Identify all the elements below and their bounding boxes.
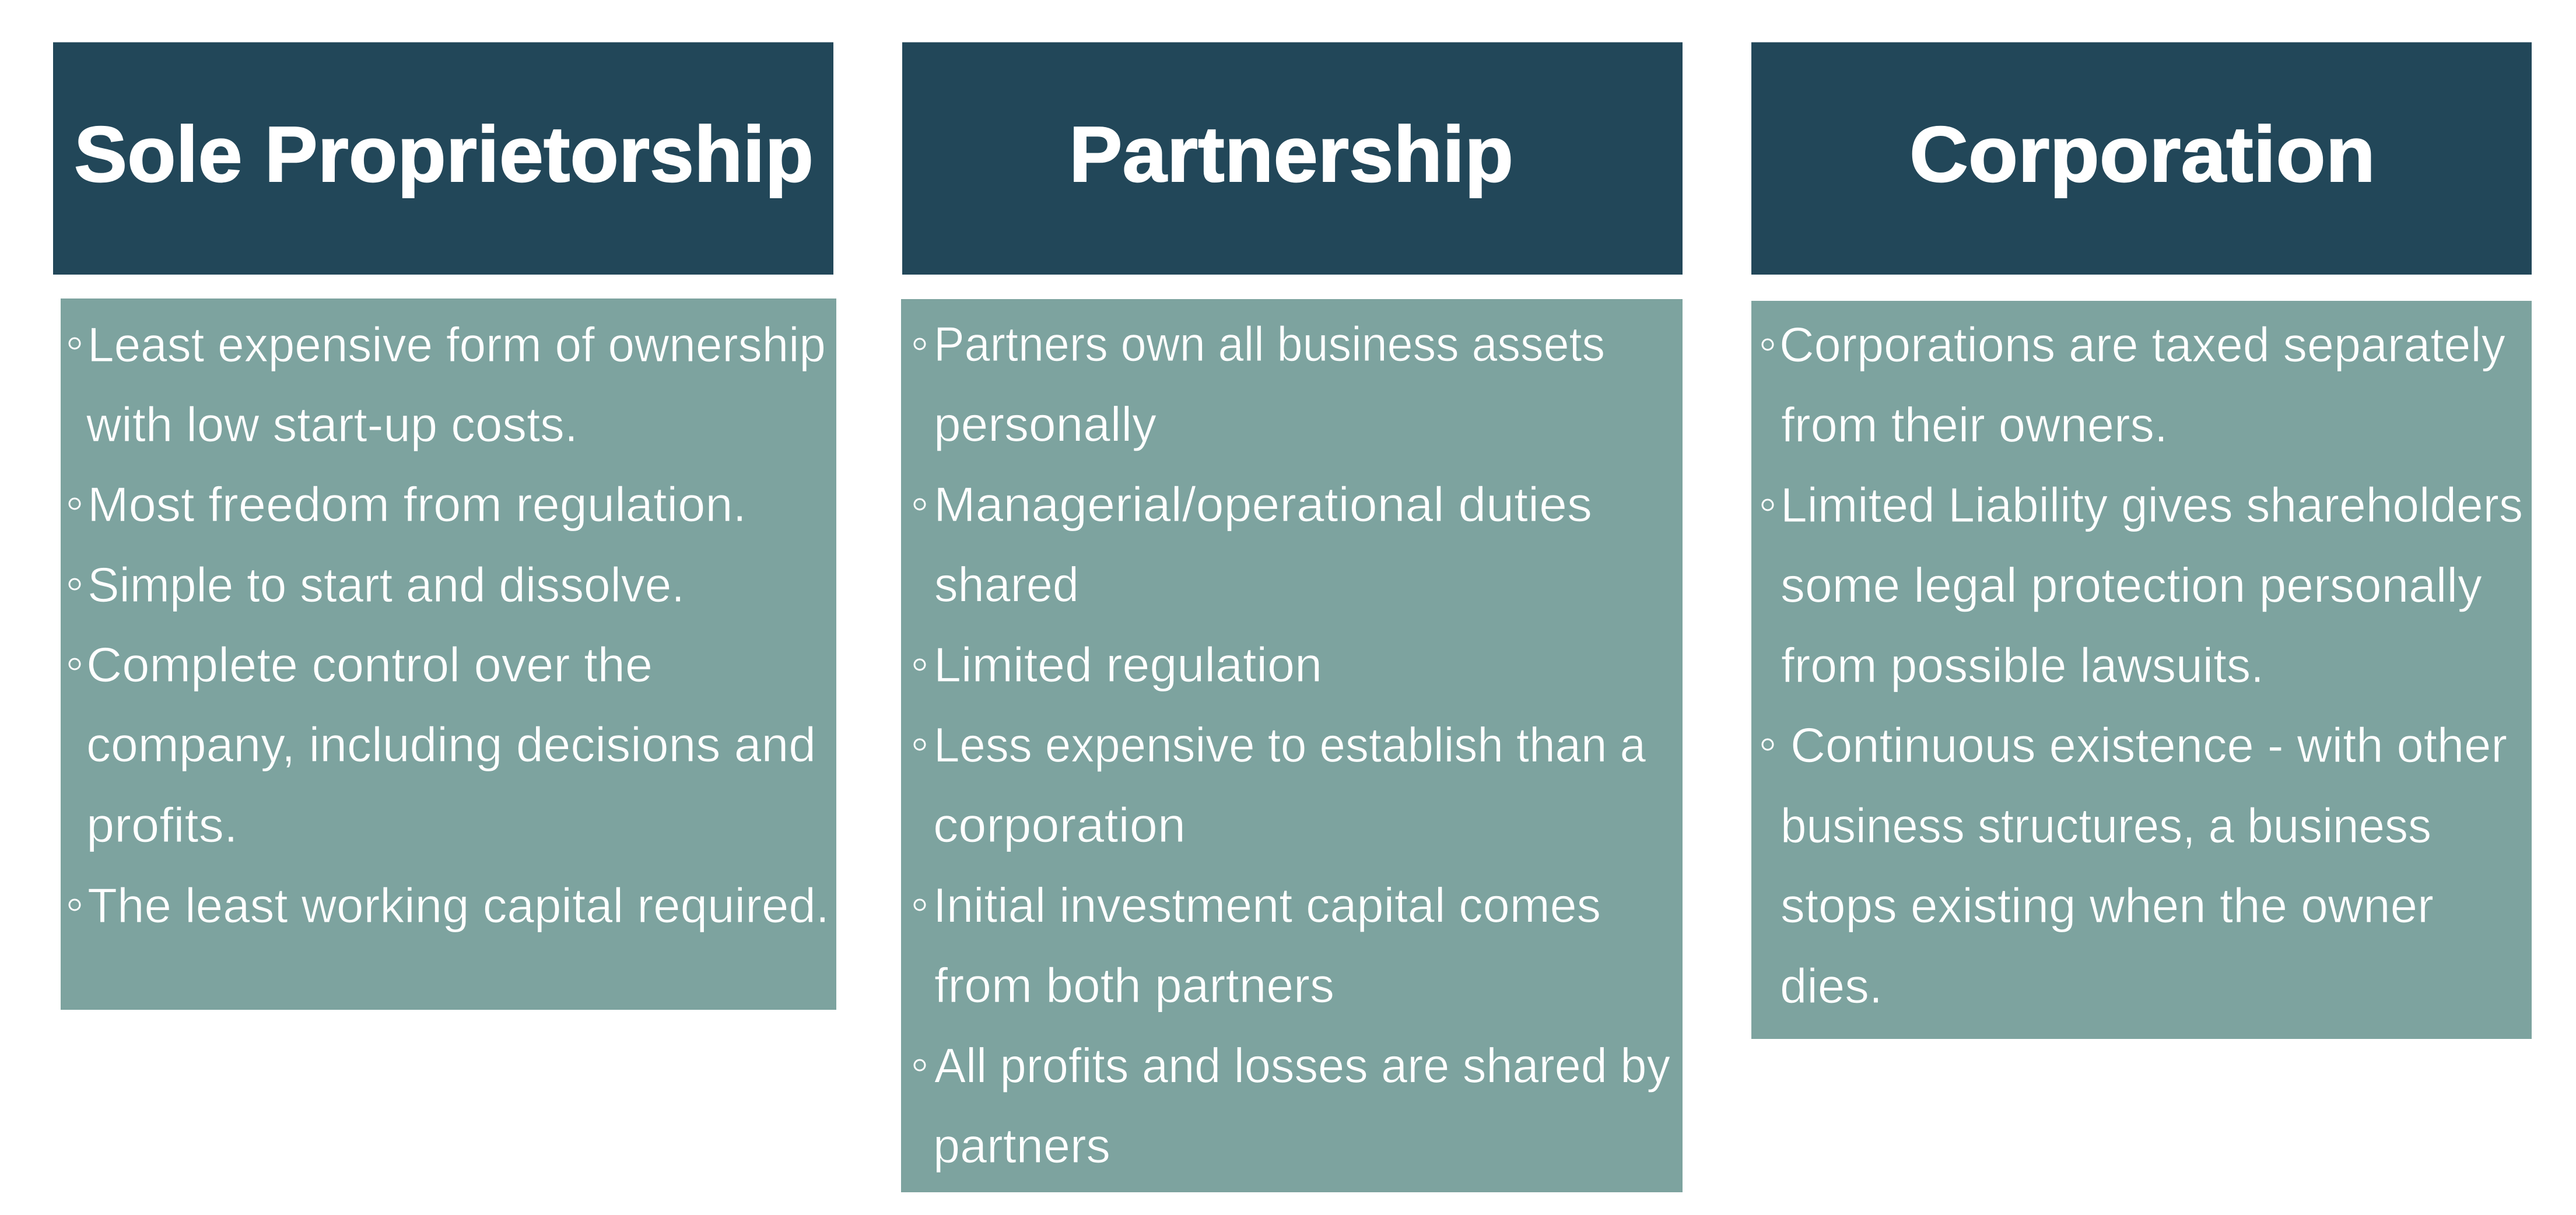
bullet: investment capital: from both partners [934, 958, 1334, 1013]
bullet: continuous existence [1762, 718, 2507, 1013]
bullet: duties shared: Managerial/operational duties [934, 477, 1592, 532]
bullet: continuous existence: business structures, a business [1781, 798, 2431, 853]
bullet: simple to start: Simple to start and dissolve. [87, 557, 685, 612]
bullet: profits and losses: All profits and losses are shared by [934, 1038, 1670, 1093]
bullet: profits and losses [914, 1038, 1670, 1173]
bullet: business assets [914, 317, 1605, 451]
bullet: taxed separately [1762, 317, 2505, 452]
bullet: business assets: personally [934, 396, 1156, 451]
bullet: duties shared: shared [934, 557, 1079, 612]
bullet: limited regulation: Limited regulation [934, 637, 1322, 692]
bullet: low cost: Least expensive form of ownership [87, 317, 826, 372]
heading panel: Corporation: Corporation [1909, 110, 2375, 198]
bullet: complete control: Complete control over the [86, 637, 653, 692]
bullet: less expensive: corporation [933, 798, 1186, 852]
column: Sole Proprietorship [53, 42, 836, 1010]
column: Partnership [901, 42, 1683, 1192]
bullet: taxed separately: from their owners. [1781, 398, 2168, 452]
bullet: complete control: company, including decisions and [86, 717, 816, 772]
heading panel: Partnership: Partnership [1069, 110, 1513, 198]
bullet: limited liability: from possible lawsuits. [1781, 638, 2264, 693]
panel: Partnership points [901, 299, 1683, 1192]
heading panel: Sole Proprietorship [53, 42, 833, 275]
bullet: less expensive [914, 717, 1646, 852]
bullet: freedom from regulation: Most freedom from regulation. [87, 477, 746, 532]
bullet: continuous existence: stops existing when the owner [1781, 878, 2434, 933]
bullet: low cost [69, 317, 826, 452]
bullet: investment capital: Initial investment capital comes [933, 878, 1601, 933]
bullet: low cost: with low start-up costs. [86, 397, 578, 452]
heading panel: Partnership [902, 42, 1683, 275]
bullet: taxed separately: Corporations are taxed separately [1779, 317, 2505, 372]
bullet: complete control: profits. [86, 798, 238, 852]
column: Corporation [1751, 42, 2532, 1039]
bullet: limited liability [1762, 477, 2523, 693]
bullet: limited liability: some legal protection personally [1781, 557, 2482, 612]
bullet: continuous existence: dies. [1780, 958, 1883, 1013]
bullet: profits and losses: partners [933, 1118, 1110, 1173]
bullet: duties shared [914, 477, 1592, 612]
bullet: working capital: The least working capital required. [87, 878, 829, 933]
heading panel: Corporation [1751, 42, 2532, 275]
panel: Sole Proprietorship points [61, 299, 836, 1010]
bullet: limited liability: Limited Liability gives shareholders [1781, 477, 2523, 532]
bullet: continuous existence: Continuous existence - with other [1790, 718, 2507, 772]
bullet: less expensive: Less expensive to establish than a [934, 717, 1646, 772]
bullet: business assets: Partners own all business assets [934, 317, 1605, 371]
bullet: complete control [69, 637, 816, 852]
bullet: investment capital [914, 878, 1601, 1013]
heading panel: Sole Proprietorship: Sole Proprietorship [74, 110, 814, 198]
panel: Corporation points [1751, 301, 2532, 1039]
